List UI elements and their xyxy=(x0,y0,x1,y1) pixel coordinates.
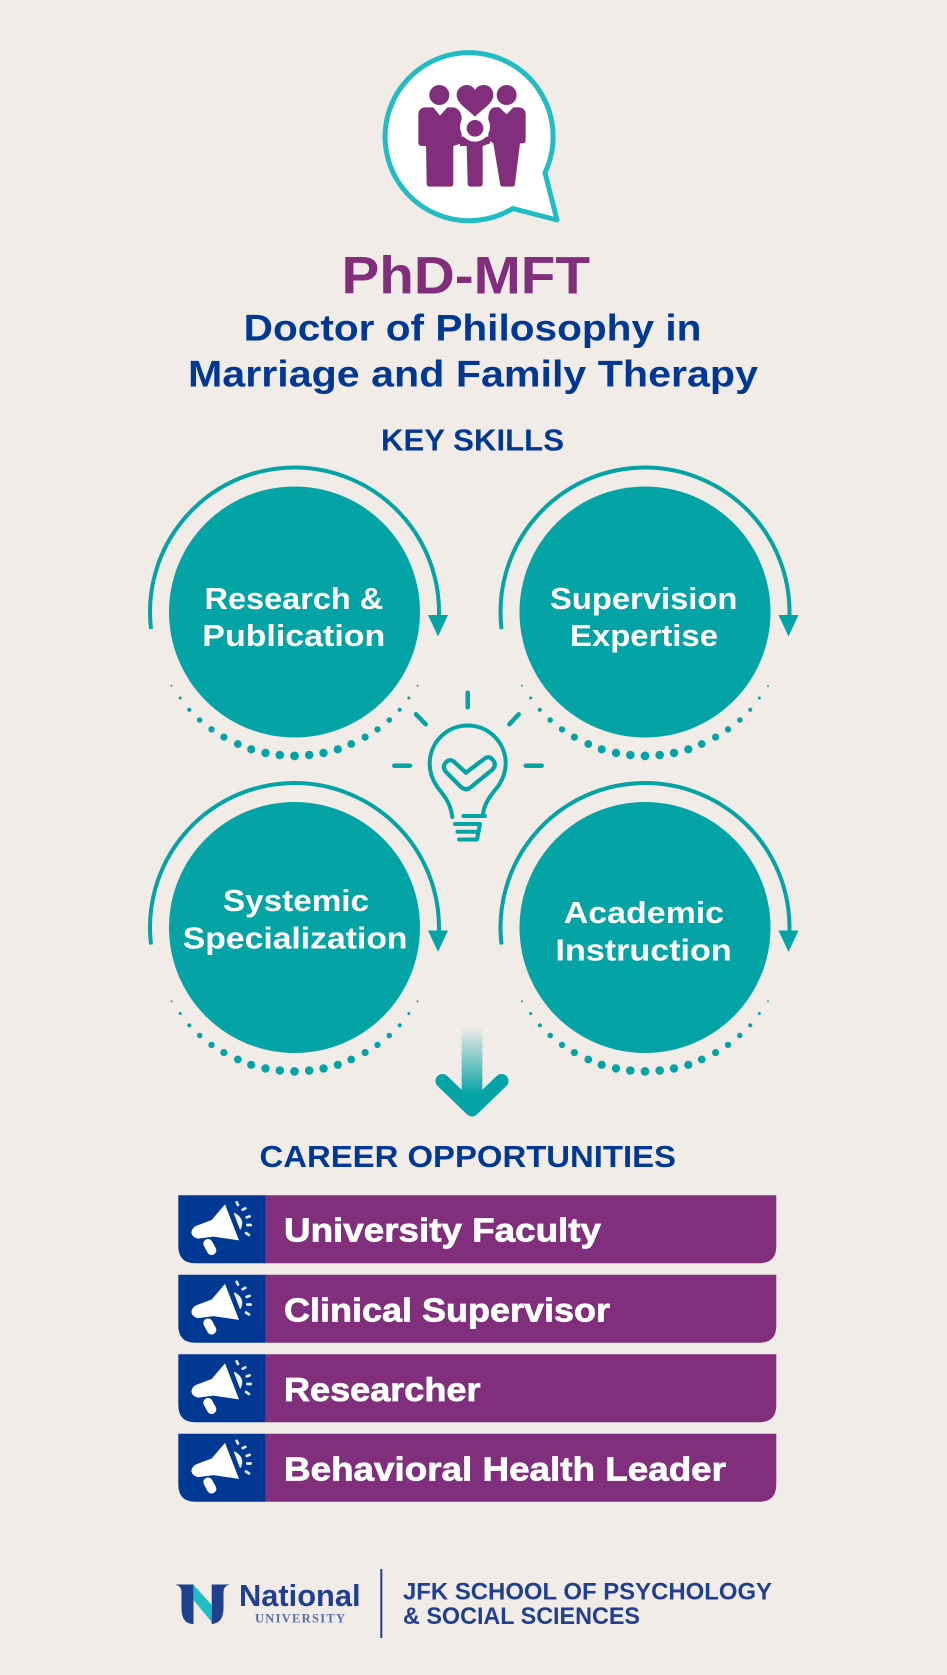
title: PhD-MFT xyxy=(342,246,590,306)
career: researcher: Researcher xyxy=(284,1372,480,1409)
skill: supervision expertise xyxy=(501,468,798,760)
heading: career opportunities: CAREER OPPORTUNITIES xyxy=(260,1139,676,1174)
skill: research and publication: Research & xyxy=(204,581,383,616)
icon: family in speech bubble xyxy=(385,53,557,221)
career: clinical supervisor xyxy=(178,1275,776,1343)
skill: academic instruction: Academic xyxy=(564,895,724,930)
skill: academic instruction: Instruction xyxy=(556,933,732,968)
logo: national university: National xyxy=(239,1578,361,1613)
career: clinical supervisor: Clinical Supervisor xyxy=(284,1292,610,1329)
family figures xyxy=(418,85,526,187)
skill: systemic specialization: Specialization xyxy=(183,920,408,955)
icon: light bulb with check xyxy=(394,693,542,840)
skill: supervision expertise: Supervision xyxy=(550,581,737,616)
skill: systemic specialization: Systemic xyxy=(223,883,369,918)
skill: research and publication xyxy=(150,468,448,760)
career: university faculty xyxy=(178,1195,776,1263)
school name: & SOCIAL SCIENCES xyxy=(403,1603,640,1630)
skill: research and publication: Publication xyxy=(202,618,385,653)
speech bubble xyxy=(385,53,557,221)
career: behavioral health leader: Behavioral Health Leader xyxy=(284,1451,726,1488)
subtitle: Doctor of Philosophy in xyxy=(244,308,701,349)
career: university faculty: University Faculty xyxy=(284,1213,601,1250)
school name: JFK SCHOOL OF PSYCHOLOGY xyxy=(403,1578,772,1605)
career: behavioral health leader xyxy=(178,1434,776,1502)
logo: national university xyxy=(175,1578,361,1626)
subtitle: Marriage and Family Therapy xyxy=(188,354,758,395)
school name xyxy=(403,1578,772,1630)
career: researcher xyxy=(178,1354,776,1422)
logo: national university: UNIVERSITY xyxy=(255,1612,345,1626)
skill: academic instruction xyxy=(501,783,798,1076)
skill: supervision expertise: Expertise xyxy=(570,618,718,653)
divider xyxy=(380,1569,382,1638)
arrow: down to careers xyxy=(442,1027,502,1110)
skill: systemic specialization xyxy=(150,783,448,1076)
heading: key skills: KEY SKILLS xyxy=(381,423,564,458)
subtitle xyxy=(188,308,758,395)
